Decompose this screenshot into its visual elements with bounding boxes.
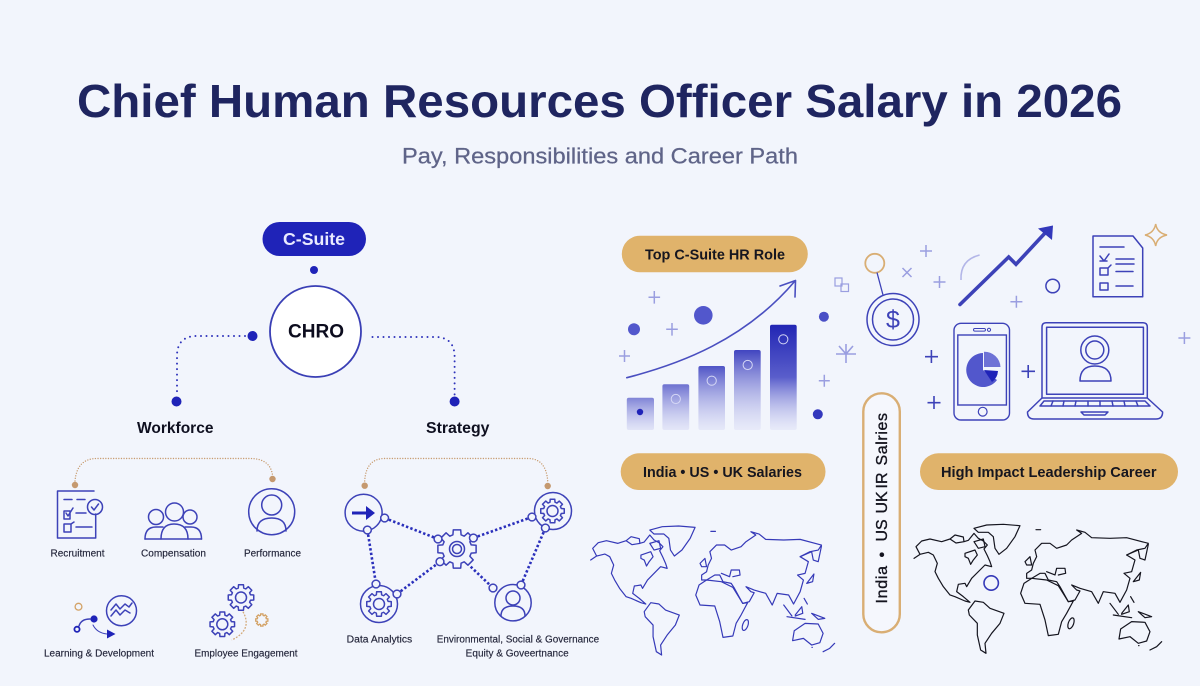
icon: learning and development: [74, 596, 136, 638]
pill: Top C-Suite HR Role: Top C-Suite HR Role: [645, 246, 785, 264]
bar chart: [627, 325, 797, 430]
pill: High Impact Leadership Career: [920, 453, 1178, 490]
icon: checklist document: [1093, 236, 1143, 297]
label: Learning and Development: Learning & Development: [44, 648, 154, 660]
org chart: CHRO hierarchy: [137, 222, 490, 437]
Workforce heading: Workforce: [137, 420, 214, 437]
pill: India US UK Salaries: India • US • UK Salaries: [643, 464, 802, 481]
vertical pill: India US UK IR Salaries: Salries: [874, 412, 891, 466]
label: ESG line 2: Equity & Goveertnance: [466, 648, 569, 660]
icon: dollar coin with tan ring: $: [886, 306, 900, 334]
panel: top role bar chart: [619, 236, 830, 430]
CHRO circle: CHRO: [288, 322, 344, 342]
icon: tan sparkle: [1145, 224, 1167, 246]
icon: employee engagement gears: [210, 585, 268, 640]
icon: asterisk and small squares: [835, 278, 856, 363]
label: Performance: Performance: [244, 548, 301, 560]
pill: Top C-Suite HR Role: [622, 236, 808, 272]
network dotted links: [367, 517, 545, 594]
tan bracket strategy: [362, 458, 551, 489]
icon: compensation group: [145, 503, 202, 539]
node: top-right gear: [534, 492, 572, 530]
tan bracket workforce: [72, 458, 276, 488]
node: bottom-right person: [495, 584, 531, 621]
icon: rising trend arrow: [960, 226, 1053, 304]
decorative marks near rising arrow: [902, 245, 1190, 409]
node: bottom-left gear: [360, 586, 398, 622]
subtitle: Pay, Responsibilities and Career Path: [402, 144, 798, 168]
label: Employee Engagement: Employee Engagement: [194, 648, 298, 660]
CHRO circle: [270, 286, 361, 377]
icon: dollar coin with tan ring: [865, 254, 919, 346]
label: Compensation: Compensation: [141, 548, 206, 560]
map: blue world map: [591, 526, 835, 655]
connector to Workforce: [172, 331, 258, 406]
node: central gear: [438, 530, 476, 568]
map: black world map: [914, 524, 1162, 653]
vertical pill: India US UK IR Salaries: India: [874, 565, 891, 604]
label: ESG line 1: Environmental, Social & Governance: [437, 634, 600, 646]
Strategy heading: Strategy: [426, 420, 490, 437]
node: arrow: [345, 494, 382, 531]
vertical pill: India US UK IR Salaries: [863, 393, 900, 632]
network junction rings: [364, 513, 549, 598]
C-Suite pill: C-Suite: [283, 229, 345, 249]
map marker ring: [984, 576, 998, 590]
icon: laptop with user: [1028, 323, 1163, 419]
title: Chief Human Resources Officer Salary in 2026: [77, 75, 1122, 127]
C-Suite pill: [262, 222, 366, 256]
icon: smartphone with pie chart: [954, 323, 1010, 420]
icon: performance person: [249, 489, 295, 535]
growth arrow: [627, 280, 796, 378]
connector to Strategy: [372, 337, 460, 406]
pill: High Impact Leadership Career: High Impact Leadership Career: [941, 464, 1157, 481]
label: Data Analytics: Data Analytics: [347, 634, 412, 646]
panel: strategy network: [345, 458, 600, 660]
label: Recruitment: Recruitment: [50, 548, 105, 560]
panel: workforce functions: [44, 458, 301, 660]
vertical pill: India US UK IR Salaries: IR: [874, 472, 891, 488]
vertical pill: India US UK IR Salaries: •: [874, 552, 891, 558]
vertical pill: India US UK IR Salaries: UK: [874, 491, 891, 514]
pill: India US UK Salaries: [621, 453, 826, 490]
decorative dots and plus marks: [619, 291, 830, 419]
icon: recruitment checklist: [58, 491, 102, 538]
vertical pill: India US UK IR Salaries: US: [874, 519, 891, 542]
